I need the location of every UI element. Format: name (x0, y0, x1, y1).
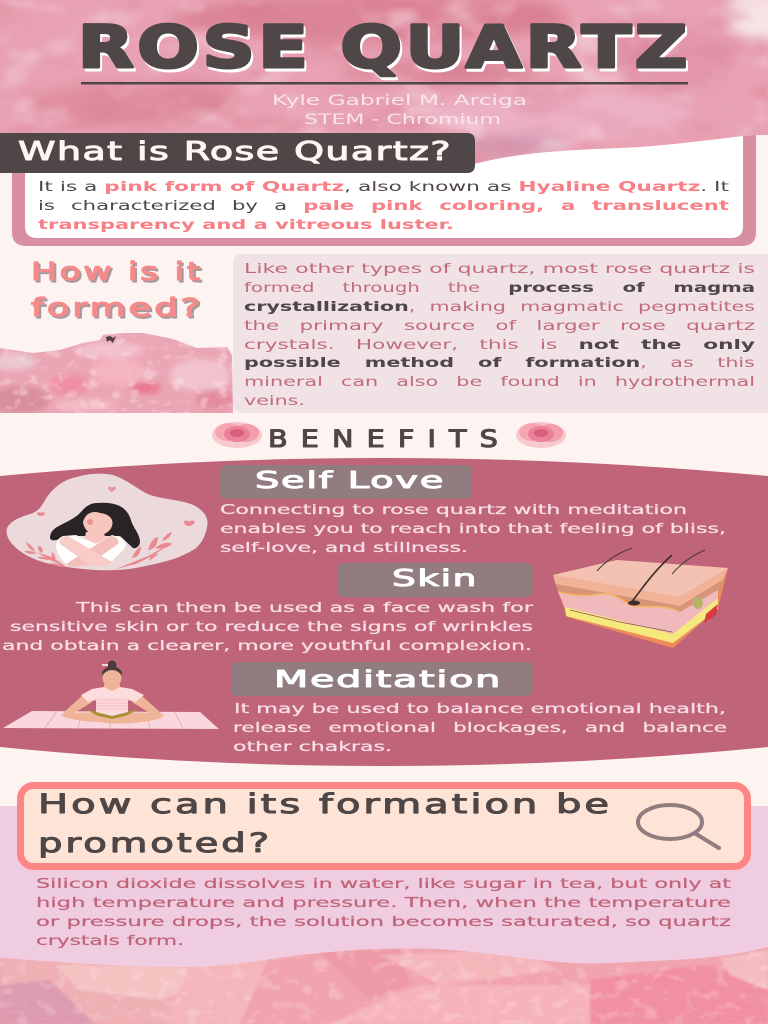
heading bar: what is rose quartz (0, 133, 475, 173)
panel: how is it formed (233, 254, 768, 413)
self love text: Connecting to rose quartz with meditation (220, 502, 687, 518)
heading: how is it formed: How is it (33, 259, 205, 288)
label: skin: Skin (392, 566, 478, 592)
author (272, 93, 527, 128)
panel: what is rose quartz (12, 135, 756, 246)
formation text: the primary source of larger rose quartz (244, 318, 755, 334)
definition text: transparency and a vitreous luster. (38, 217, 454, 233)
skin text: and obtain a clearer, more youthful complexion. (2, 638, 532, 654)
self love text: self-love, and stillness. (220, 540, 468, 556)
title: ROSE QUARTZ (78, 13, 691, 81)
label: self love (220, 465, 472, 499)
label: self love: Self Love (255, 468, 445, 494)
icon: skin cross-section (553, 548, 728, 648)
benefit: skin (2, 548, 728, 654)
icon: rose left (212, 422, 262, 448)
meditation text: release emotional blockages, and balance (233, 720, 727, 736)
icon: magnifying glass (638, 805, 719, 848)
meditation text: It may be used to balance emotional health, (234, 701, 726, 717)
heading: how is it formed: formed? (33, 295, 205, 324)
formation promotion text (36, 876, 731, 949)
skin text: sensitive skin or to reduce the signs of wrinkles (10, 619, 533, 635)
heading: how is it formed (31, 257, 205, 324)
author: STEM - Chromium (304, 112, 501, 128)
formation promotion text: Silicon dioxide dissolves in water, like sugar in tea, but only at (36, 876, 731, 892)
label: meditation: Meditation (274, 667, 502, 693)
formation text (244, 261, 755, 409)
panel background (233, 254, 768, 413)
panel frame (12, 135, 756, 246)
band background (0, 458, 768, 766)
benefit: self love (7, 465, 726, 570)
panel interior (25, 135, 743, 238)
self love text (220, 502, 726, 556)
formation text: possible method of formation , as this (244, 355, 755, 371)
panel: how can its formation be promoted (0, 786, 768, 1024)
header rose quartz texture (0, 0, 768, 175)
self love text: enables you to reach into that feeling of bliss, (220, 521, 726, 537)
heading: benefits: BENEFITS (268, 425, 511, 453)
formation text: Like other types of quartz, most rose quartz is (244, 261, 755, 277)
definition text: It is a pink form of Quartz , also known as Hyaline Quartz . It (38, 179, 729, 195)
meditation text (233, 701, 727, 755)
formation text: mineral can also be found in hydrothermal (244, 374, 755, 390)
label: meditation (231, 662, 533, 696)
meditation text: other chakras. (233, 739, 392, 755)
formation promotion text: crystals form. (36, 933, 184, 949)
heading: how is it formed: How is it (31, 257, 203, 286)
label: skin (337, 563, 533, 597)
formation promotion text: or pressure drops, the solution becomes saturated, so quartz (36, 914, 731, 930)
skin text (2, 600, 534, 654)
author: Kyle Gabriel M. Arciga (272, 93, 527, 109)
skin text: This can then be used as a face wash for (74, 600, 534, 616)
benefit: meditation (3, 660, 727, 755)
icon: rose right (516, 422, 566, 448)
formation text: veins. (244, 393, 305, 409)
heading: how can its formation be promoted: How can its formation be (38, 789, 612, 820)
lilac background (0, 806, 768, 976)
bottom rose quartz texture (0, 940, 768, 1024)
formation text: crystallization , making magmatic pegmatites (244, 299, 755, 315)
crystal image (0, 330, 235, 414)
icon: woman hugging herself (7, 474, 208, 570)
formation text: formed through the process of magma (244, 280, 755, 296)
panel: benefits (0, 458, 768, 766)
heading box (20, 786, 748, 866)
heading: how can its formation be promoted (38, 789, 612, 859)
icon: meditating person (3, 660, 219, 729)
formation promotion text: high temperature and pressure. Then, when the temperature (36, 895, 731, 911)
definition text: is characterized by a pale pink coloring, a translucent (38, 198, 730, 214)
definition text (38, 179, 730, 233)
heading bar: what is rose quartz: What is Rose Quartz? (18, 137, 452, 167)
formation text: crystals. However, this is not the only (244, 337, 755, 353)
heading: how is it formed: formed? (31, 293, 203, 322)
title: ROSE QUARTZ (80, 16, 693, 84)
heading: how can its formation be promoted: promoted? (38, 828, 272, 859)
